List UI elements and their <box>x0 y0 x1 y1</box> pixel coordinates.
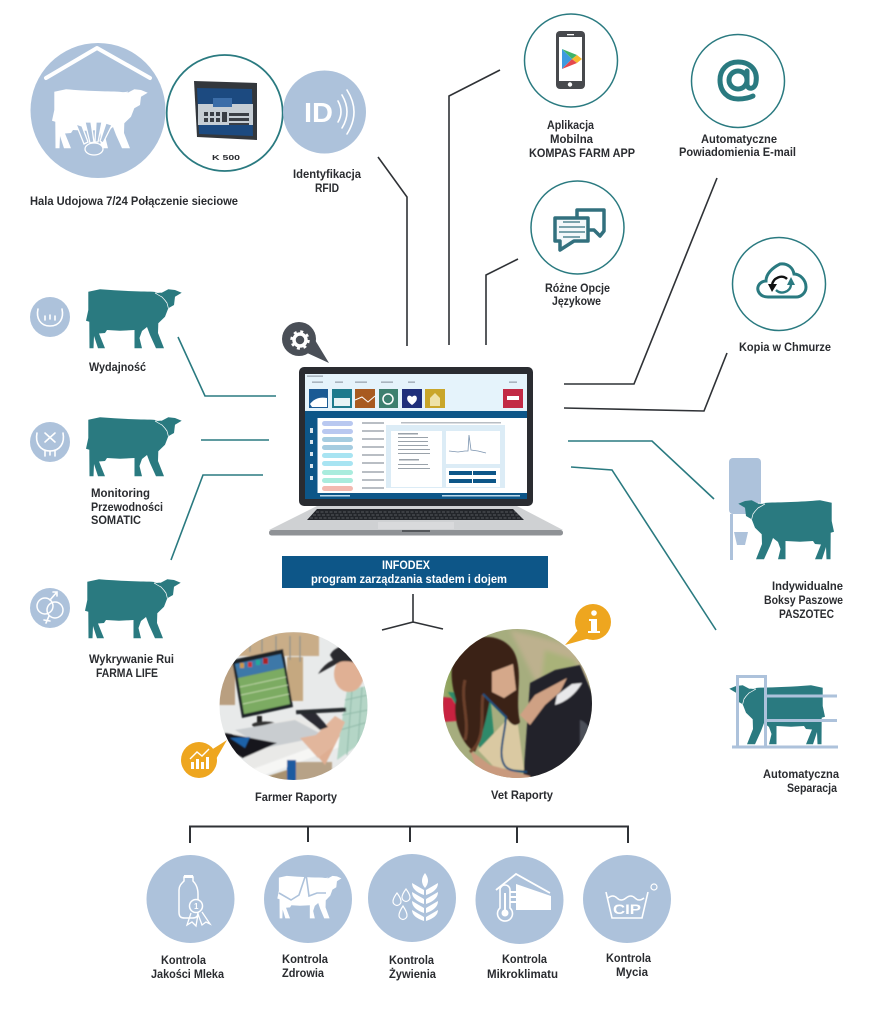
label: separation <box>763 767 839 795</box>
panel: feeding <box>368 854 456 981</box>
label: RFID <box>293 167 361 195</box>
label: health <box>282 952 328 980</box>
label: mobile app: KOMPAS FARM APP <box>529 146 635 160</box>
panel: milk quality <box>146 855 234 981</box>
panel: CIP washing <box>583 855 671 979</box>
banner: INFODEX <box>282 556 548 588</box>
software table <box>305 411 527 499</box>
label: vet reports: Vet Raporty <box>491 788 553 802</box>
label: CIP washing <box>606 951 651 979</box>
label: mobile app: Mobilna <box>550 132 593 146</box>
label: languages: Językowe <box>552 294 601 308</box>
panel: CIP washing: CIP <box>613 901 641 917</box>
label: feeding <box>389 953 436 981</box>
icon: RFID <box>283 70 366 154</box>
label: health: Zdrowia <box>282 966 324 980</box>
label: feeding boxes <box>764 579 843 621</box>
icon: languages <box>531 181 624 274</box>
K500 label: K 500 <box>212 153 240 162</box>
panel: health <box>264 855 352 980</box>
panel: heat detection <box>30 579 181 680</box>
icon: email <box>692 34 784 128</box>
label: feeding: Żywienia <box>389 966 436 981</box>
label: milking hall: Hala Udojowa 7/24 Połączenie sieciowe <box>30 194 238 208</box>
banner: INFODEX: INFODEX <box>382 558 430 572</box>
label: RFID: RFID <box>315 181 339 195</box>
label: microclimate: Kontrola <box>502 952 547 966</box>
label: milk quality: Kontrola <box>161 953 206 967</box>
icon: settings bubble <box>282 322 329 363</box>
label: feeding: Kontrola <box>389 953 434 967</box>
software tiles <box>309 389 523 408</box>
cow: heat detection <box>85 579 181 638</box>
label: mobile app: Aplikacja <box>547 118 594 132</box>
icon: gender symbols <box>30 588 70 628</box>
label: health: Kontrola <box>282 952 328 966</box>
label: conductivity: SOMATIC <box>91 513 141 527</box>
label: farmer reports: Farmer Raporty <box>255 790 337 804</box>
label: yield: Wydajność <box>89 360 146 374</box>
label: languages <box>545 281 610 308</box>
label: email: Automatyczne <box>701 132 777 146</box>
label: RFID: Identyfikacja <box>293 167 361 181</box>
label: CIP washing: Mycia <box>616 965 648 979</box>
icon: RFID: ID <box>304 97 333 128</box>
photo: farmer at computer <box>219 632 372 782</box>
banner: INFODEX: program zarządzania stadem i dojem <box>311 572 507 586</box>
label: separation: Automatyczna <box>763 767 839 781</box>
label: email <box>679 132 796 159</box>
icon: mobile app <box>524 14 618 107</box>
icon: cloud backup <box>732 238 826 330</box>
label: conductivity: Przewodności <box>91 500 163 514</box>
panel: separation <box>729 675 839 795</box>
label: feeding boxes: PASZOTEC <box>779 607 834 621</box>
label: conductivity <box>91 486 163 527</box>
label: mobile app <box>529 118 635 160</box>
label: cloud backup: Kopia w Chmurze <box>739 340 831 354</box>
photo: vet with cow <box>443 629 595 784</box>
label: feeding boxes: Boksy Paszowe <box>764 593 843 607</box>
software menu bar <box>307 376 517 383</box>
label: conductivity: Monitoring <box>91 486 150 500</box>
connector lines <box>171 70 727 843</box>
label: milk quality <box>151 953 224 981</box>
panel: yield <box>30 289 182 374</box>
cow: conductivity <box>86 417 182 476</box>
label: microclimate <box>487 952 558 981</box>
laptop with INFODEX screen <box>269 367 563 536</box>
label: heat detection <box>89 652 174 680</box>
icon: conductivity udder <box>30 422 70 462</box>
panel: K500 controller <box>167 55 283 171</box>
panel: milk quality: 1 <box>194 902 199 911</box>
label: feeding boxes: Indywidualne <box>772 579 843 593</box>
icon: milking hall cow <box>30 43 166 178</box>
label: heat detection: FARMA LIFE <box>96 666 158 680</box>
panel: conductivity <box>30 417 182 527</box>
label: email: Powiadomienia E-mail <box>679 145 796 159</box>
label: heat detection: Wykrywanie Rui <box>89 652 174 666</box>
label: milk quality: Jakości Mleka <box>151 967 224 981</box>
label: CIP washing: Kontrola <box>606 951 651 965</box>
label: separation: Separacja <box>787 781 837 795</box>
panel: microclimate <box>476 856 564 981</box>
panel: feeding boxes <box>729 458 843 621</box>
label: microclimate: Mikroklimatu <box>487 967 558 981</box>
badge: chart <box>181 740 227 778</box>
cow: yield <box>86 289 182 348</box>
icon: yield udder <box>30 297 70 337</box>
label: languages: Różne Opcje <box>545 281 610 295</box>
badge: info <box>565 604 611 645</box>
